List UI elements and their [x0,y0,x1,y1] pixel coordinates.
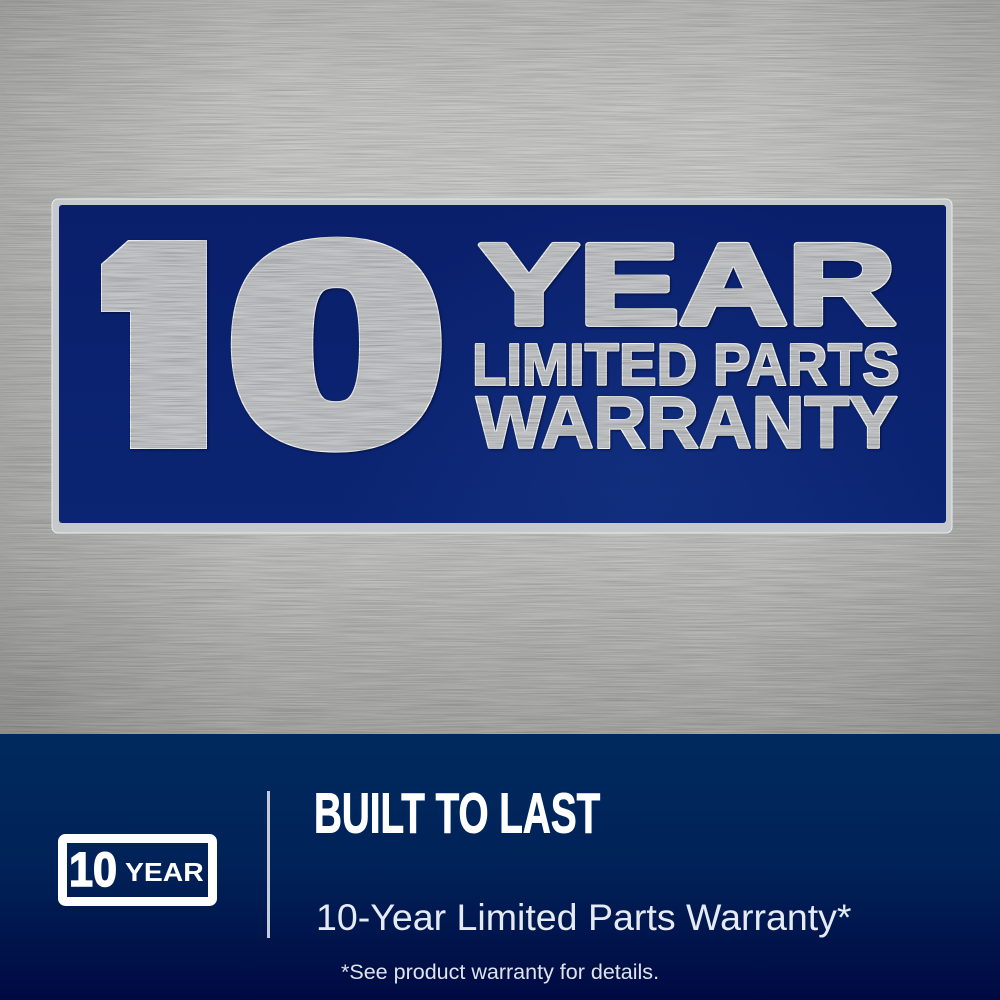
digit 1 [101,240,209,451]
heading: YEAR: YEAR [479,221,896,349]
logo frame [62,838,212,902]
plate blue face [59,205,946,523]
panel: footer band [0,734,1000,1000]
heading: LIMITED PARTS: LIMITED PARTS [472,333,900,398]
text: footnote: *See product warranty for details. [341,960,659,984]
logo numeral: 10 [69,843,117,897]
panel: warranty badge plate [52,173,952,533]
plate blue glow [59,205,946,523]
divider [267,791,270,938]
heading: built to last: BUILT TO LAST [314,782,600,845]
icon: 10 year logo [62,838,212,902]
digit 0: 0 [231,191,442,498]
digit 1: 1 [54,173,265,513]
heading: WARRANTY: WARRANTY [476,382,898,464]
panel: brushed stainless steel background [0,0,1000,734]
logo word: YEAR [125,857,204,887]
plate metal frame [52,199,952,533]
heading: embossed badge lettering [101,236,900,454]
text: warranty line: 10-Year Limited Parts Warranty* [316,896,852,938]
